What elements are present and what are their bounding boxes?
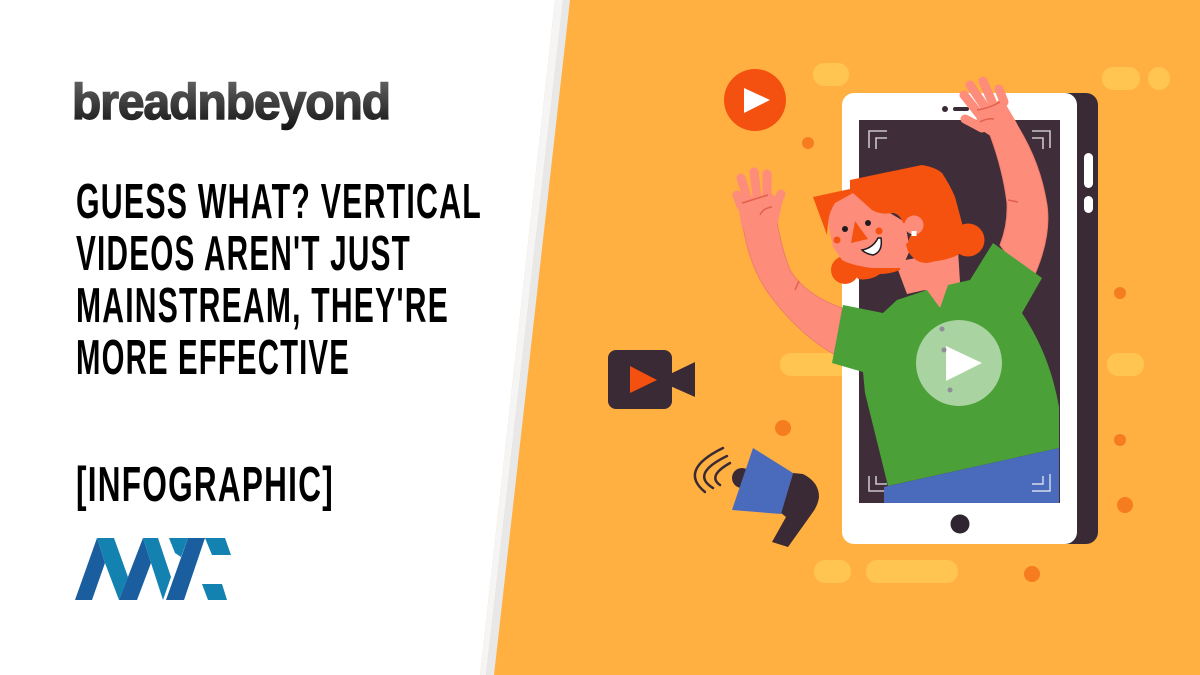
icon: play button <box>724 69 786 131</box>
title: MORE EFFECTIVE <box>76 331 350 385</box>
title <box>76 175 482 385</box>
person <box>737 81 1059 503</box>
hair back curls <box>831 256 900 284</box>
neck <box>895 250 960 308</box>
shirt <box>832 243 1059 486</box>
logo: breadnbeyond: breadnbeyond <box>72 74 390 130</box>
left arm <box>743 222 842 355</box>
icon: video camera <box>608 350 695 409</box>
icon: megaphone <box>695 448 819 547</box>
ear <box>904 216 924 234</box>
eyes, nose, cheeks, mouth <box>842 226 848 232</box>
title: GUESS WHAT? VERTICAL <box>76 175 482 229</box>
title: VIDEOS AREN'T JUST <box>76 227 411 281</box>
face <box>828 191 910 268</box>
hair <box>813 165 966 262</box>
subtitle: infographic tag: [INFOGRAPHIC] <box>76 458 334 512</box>
decorative dots <box>775 137 1133 582</box>
phone <box>842 93 1098 544</box>
corner brackets over jeans <box>1032 474 1050 491</box>
logo: MNT mark <box>75 538 231 600</box>
right hand <box>964 81 1020 137</box>
skin creases <box>742 102 1018 290</box>
jeans <box>884 448 1059 503</box>
title: MAINSTREAM, THEY'RE <box>76 279 449 333</box>
decorative pills <box>780 63 1170 583</box>
shirt play icon <box>916 320 1002 406</box>
right arm <box>990 122 1048 285</box>
left hand <box>737 172 781 228</box>
